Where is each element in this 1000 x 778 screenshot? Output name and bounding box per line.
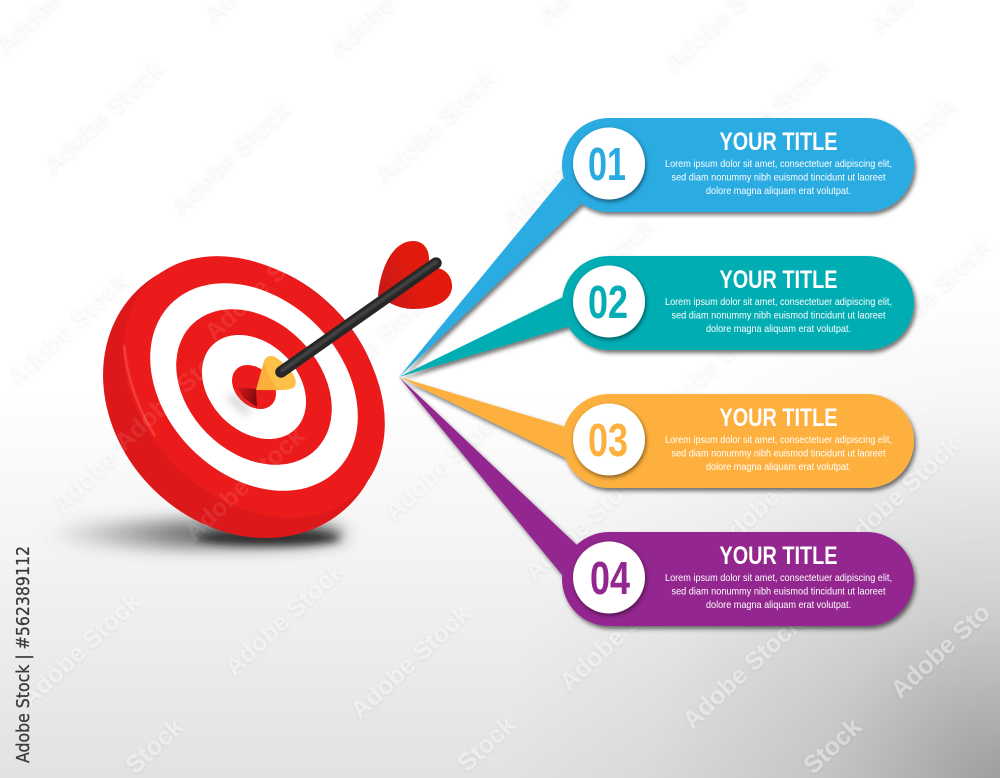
board body side xyxy=(46,201,440,595)
watermarks on background: Adobe Stock xyxy=(371,64,502,188)
watermarks over board xyxy=(109,222,330,546)
body text 02: Lorem ipsum dolor sit amet, consectetuer adipiscing elit, xyxy=(665,296,892,308)
body text 04: dolore magna aliquam erat volutpat. xyxy=(706,599,851,611)
watermarks on background: Stock xyxy=(798,713,867,778)
watermarks on background: Adobe Stock xyxy=(498,108,629,232)
body text 01: dolore magna aliquam erat volutpat. xyxy=(706,185,851,197)
watermarks over board: Adobe Stock xyxy=(199,222,330,346)
body text 02: sed diam nonummy nibh euismod tincidunt ut laoreet xyxy=(672,310,886,322)
number badge 01: 01 xyxy=(588,138,626,190)
dart shadow on bullseye xyxy=(237,387,257,407)
body text 01: sed diam nonummy nibh euismod tincidunt ut laoreet xyxy=(672,172,886,184)
watermarks on background: Adobe Stock xyxy=(379,402,510,526)
shaft xyxy=(281,262,436,372)
watermarks on background: Adobe Stock xyxy=(554,572,685,696)
watermarks on background: Adobe Sto xyxy=(885,598,996,704)
number badge 02: 02 xyxy=(588,276,628,328)
heading 04: YOUR TITLE xyxy=(720,542,838,570)
body text 03 xyxy=(665,434,892,473)
panel: 04 xyxy=(399,377,914,626)
dart xyxy=(256,241,452,390)
target shadow on floor xyxy=(45,520,345,548)
number badge 01 xyxy=(573,128,645,200)
body text 02: dolore magna aliquam erat volutpat. xyxy=(706,323,851,335)
watermarks on background: Adobe Stock xyxy=(709,432,840,556)
callout shape teal xyxy=(399,256,914,377)
number badge 02 xyxy=(573,266,645,338)
heading 01: YOUR TITLE xyxy=(720,128,838,156)
panel: 03 xyxy=(399,377,914,488)
yellow tip xyxy=(256,356,296,390)
watermarks over board: Adobe Stock xyxy=(109,332,240,456)
body text 01: Lorem ipsum dolor sit amet, consectetuer adipiscing elit, xyxy=(665,158,892,170)
dart shadow on white xyxy=(226,392,252,416)
watermarks on background: Adobe Stock xyxy=(677,610,808,734)
stock id vertical label: Adobe Stock | #562389112 xyxy=(13,546,34,763)
watermarks on background: Adobe Stock xyxy=(519,462,650,586)
body text 03: dolore magna aliquam erat volutpat. xyxy=(706,461,851,473)
heading 02: YOUR TITLE xyxy=(720,266,838,294)
body text 03: sed diam nonummy nibh euismod tincidunt ut laoreet xyxy=(672,448,886,460)
watermarks on background: Adobe Stock xyxy=(166,95,297,219)
watermarks on background: Adobe Stock xyxy=(649,302,780,426)
heading 03: YOUR TITLE xyxy=(720,404,838,432)
body text 04: Lorem ipsum dolor sit amet, consectetuer adipiscing elit, xyxy=(665,572,892,584)
watermarks on background: Adobe Stock xyxy=(219,557,350,681)
watermarks on background: Adobe Stock xyxy=(867,232,998,356)
panel: 01 xyxy=(399,118,914,377)
watermarks on background: Adobe Stock xyxy=(529,212,660,336)
body text 01 xyxy=(665,158,892,197)
number badge 04 xyxy=(573,542,645,614)
flights xyxy=(378,241,452,309)
board face rings xyxy=(71,204,437,570)
watermarks on background: Adobe Stock xyxy=(705,52,836,176)
number badge 03 xyxy=(573,404,645,476)
body text 04 xyxy=(665,572,892,611)
watermarks on background: Adobe Stock xyxy=(39,54,170,178)
body text 03: Lorem ipsum dolor sit amet, consectetuer adipiscing elit, xyxy=(665,434,892,446)
target board xyxy=(46,201,440,595)
watermarks on background: Stock xyxy=(452,711,521,778)
watermarks on background: Adobe Stock xyxy=(15,588,146,712)
watermarks over board: Adobe Stock xyxy=(179,422,310,546)
watermarks on background: Adobe Stock xyxy=(47,394,178,518)
number badge 03: 03 xyxy=(588,414,628,466)
watermarks on background: Adobe Stock xyxy=(834,432,965,556)
panel: 02 xyxy=(399,256,914,377)
callout shape purple xyxy=(399,377,914,626)
callout shape blue xyxy=(399,118,914,377)
rim highlight xyxy=(124,345,155,436)
number badge 04: 04 xyxy=(590,552,630,604)
watermarks on background: Adobe Stock xyxy=(3,267,134,391)
body text 02 xyxy=(665,296,892,335)
body text 04: sed diam nonummy nibh euismod tincidunt ut laoreet xyxy=(672,586,886,598)
watermarks on background: Stock xyxy=(120,713,189,778)
watermarks on background: Adobe Stock xyxy=(831,92,962,216)
watermarks on background: Adobe Stock xyxy=(345,600,476,724)
watermarks on background: Adobe Stock xyxy=(309,282,440,406)
callout shape orange xyxy=(399,377,914,488)
